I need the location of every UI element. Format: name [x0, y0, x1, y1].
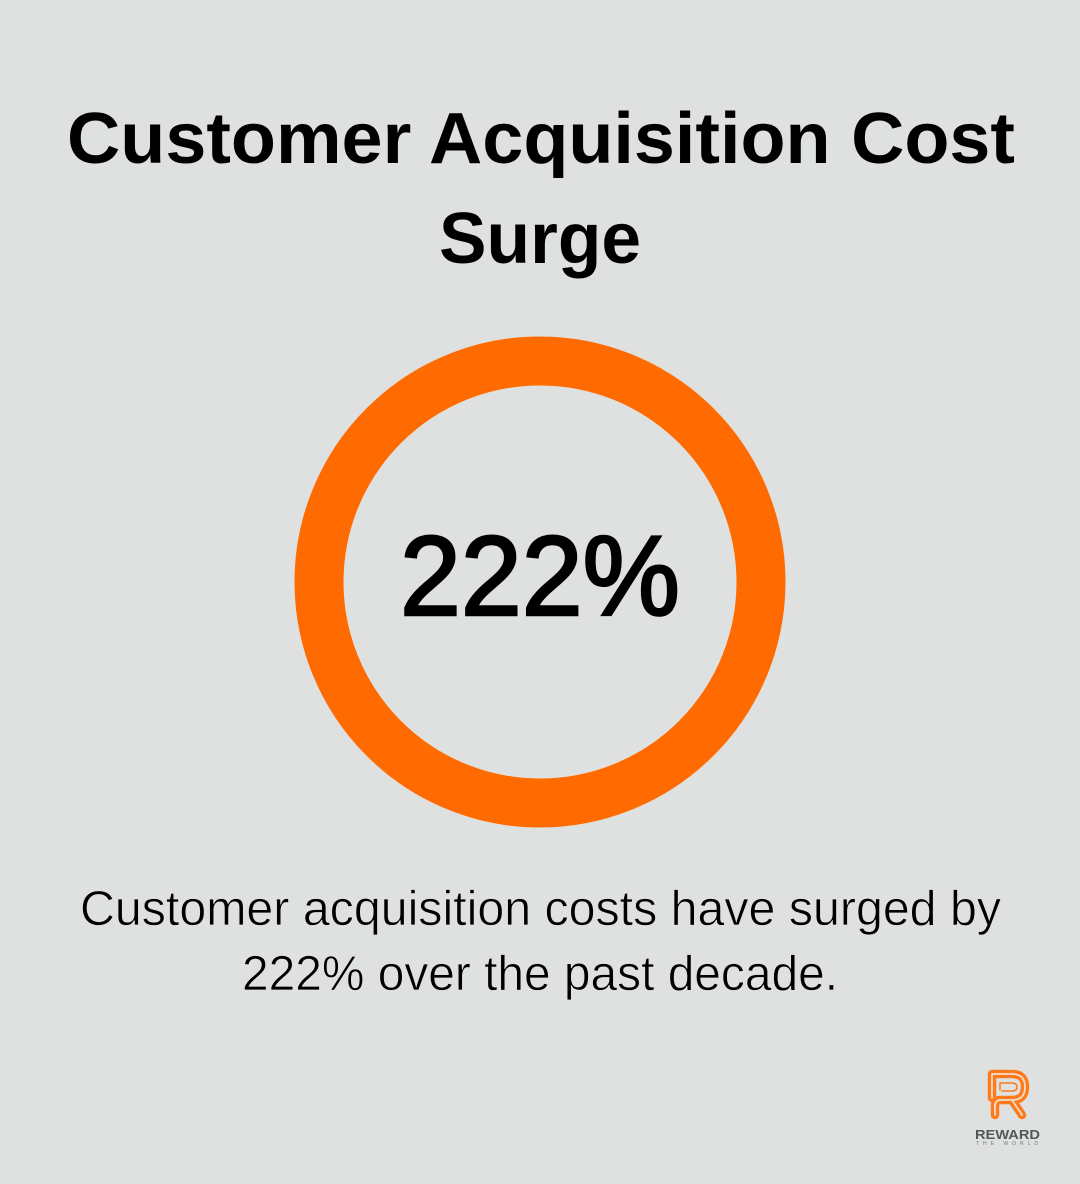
donut ring: [319, 361, 761, 803]
title: Surge: [439, 199, 641, 279]
description text: [80, 882, 1001, 1001]
logo tagline: THE WORLD: [976, 1141, 1038, 1147]
description text: 222% over the past decade.: [242, 947, 838, 1001]
description text: Customer acquisition costs have surged by: [80, 882, 1001, 936]
central statistic: 222%: 222%: [400, 513, 680, 639]
title: [67, 99, 1015, 279]
icon: R mark: [992, 1074, 1025, 1115]
logo wordmark: REWARD: [975, 1127, 1040, 1142]
logo: Reward the World: [975, 1074, 1040, 1147]
title: Customer Acquisition Cost: [67, 99, 1015, 179]
